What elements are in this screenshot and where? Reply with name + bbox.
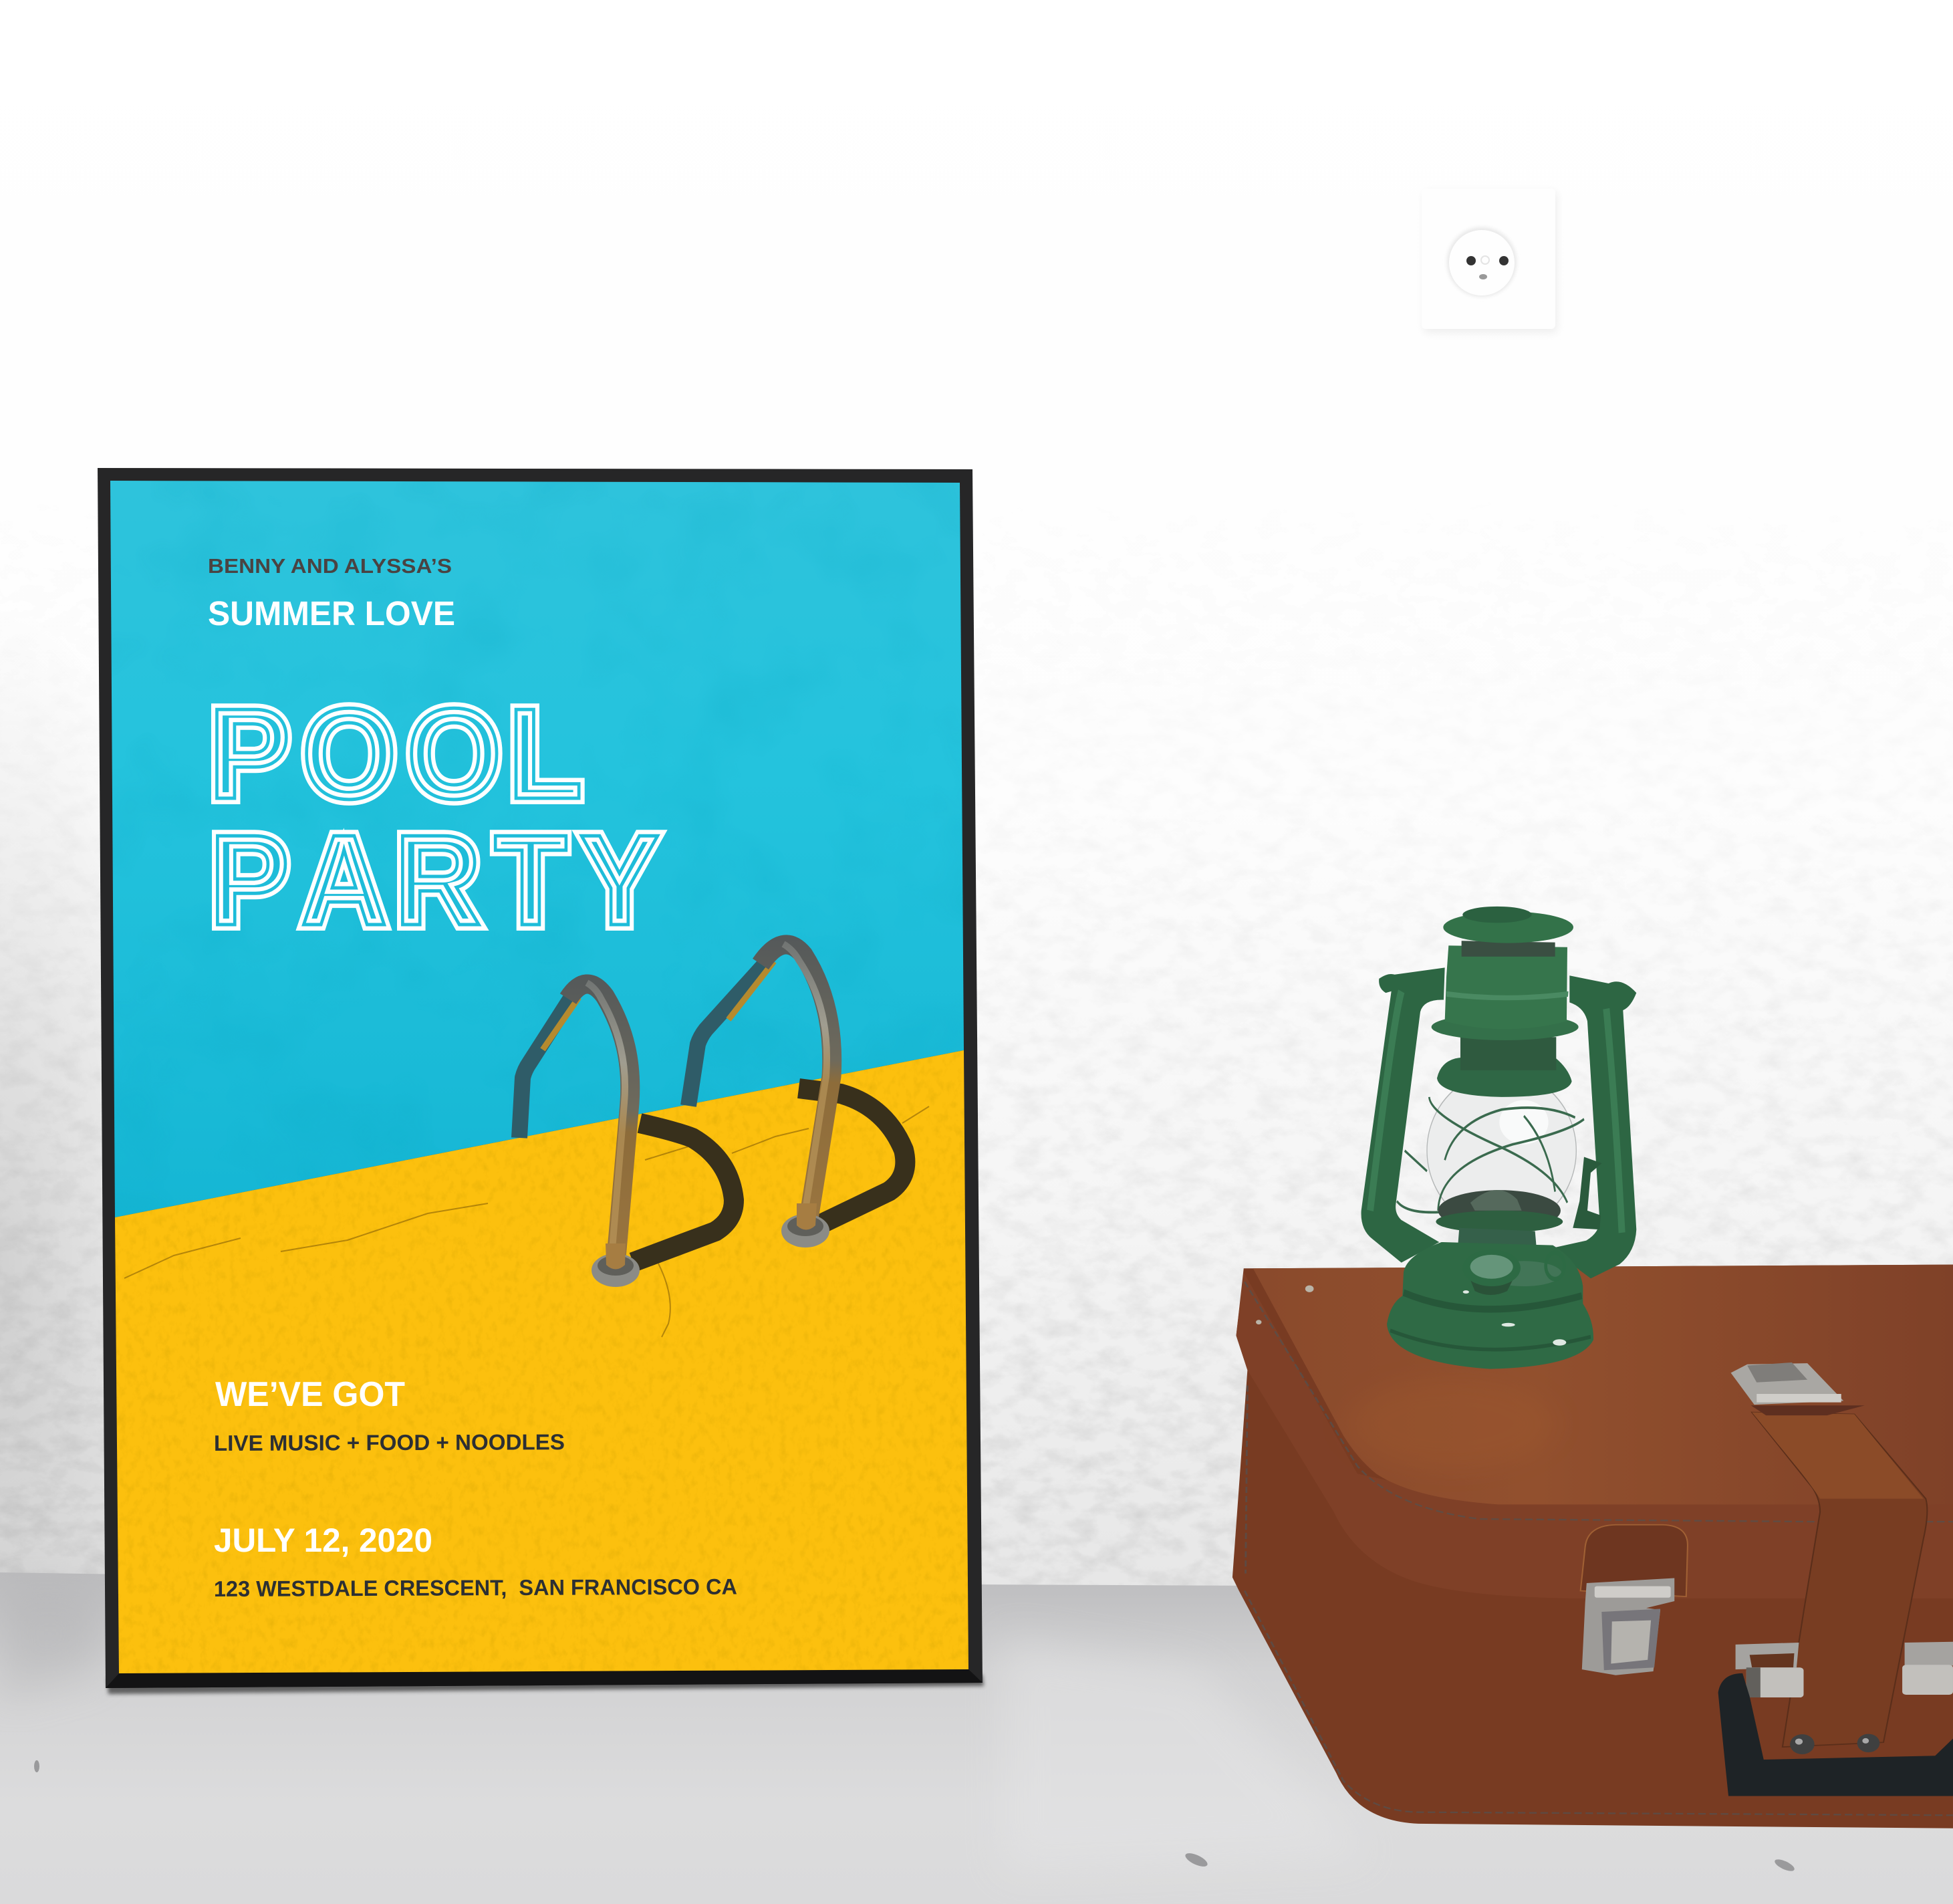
lantern lower stem: [1457, 1228, 1537, 1256]
lantern base: [1387, 1242, 1593, 1369]
poster frame: [98, 468, 983, 1688]
suitcase lid band: [1236, 1272, 1953, 1598]
lantern wire cage: [1397, 1097, 1584, 1212]
ladder left rail: [519, 983, 630, 1266]
suitcase top: [1253, 1265, 1953, 1504]
leather strap: [1752, 1413, 1927, 1747]
ladder right rail: [688, 944, 832, 1227]
address: 123 WESTDALE CRESCENT, SAN FRANCISCO CA: [214, 1574, 737, 1601]
ladder shadows: [633, 1088, 905, 1262]
lantern highlights: [1463, 1290, 1566, 1346]
lantern wick ring: [1546, 1253, 1565, 1279]
suitcase body: [1232, 1265, 1953, 1828]
wall background: [0, 687, 1953, 1586]
title: Pool (striped lettering): POOL: [209, 682, 583, 826]
suitcase: [1232, 1265, 1953, 1828]
wall socket: [1422, 189, 1557, 333]
lantern glass globe: [1427, 1072, 1576, 1229]
floor: [0, 1572, 1953, 1904]
text: live music + food + noodles: LIVE MUSIC + FOOD + NOODLES: [214, 1429, 565, 1455]
ladder right flange: [781, 1203, 829, 1247]
heading: We've Got: WE’VE GOT: [215, 1375, 405, 1414]
title: Party (striped lettering): PARTY: [209, 808, 660, 952]
lantern drum: [1445, 945, 1567, 1029]
yellow pool deck: [115, 1050, 968, 1673]
subtitle: Benny and Alyssa's: BENNY AND ALYSSA’S: [208, 554, 452, 578]
handle: [1718, 1673, 1953, 1796]
date: July 12, 2020: JULY 12, 2020: [214, 1522, 432, 1559]
lantern mid flange: [1432, 1014, 1579, 1040]
top latch: [1731, 1362, 1865, 1415]
poster artwork: [107, 478, 972, 1678]
lantern left handle: [1361, 967, 1445, 1263]
poster floor shadow: [107, 1675, 984, 1694]
handle brackets: [1736, 1642, 1953, 1697]
lantern burner: [1438, 1190, 1561, 1231]
heading: Summer Love: SUMMER LOVE: [208, 594, 455, 632]
lantern cap: [1443, 911, 1573, 943]
lantern collar: [1437, 1058, 1572, 1097]
lantern side lever: [1573, 1157, 1602, 1229]
pool water: [110, 481, 964, 1217]
title: Pool (striped lettering): POOL: [209, 682, 583, 826]
lantern: [1361, 907, 1636, 1369]
title: Party (striped lettering): PARTY: [209, 808, 660, 952]
lantern right handle: [1551, 975, 1636, 1278]
lantern neck: [1460, 1037, 1556, 1070]
suitcase stitching: [1245, 1282, 1953, 1815]
lantern fill cap: [1470, 1280, 1513, 1295]
ladder left flange: [592, 1243, 640, 1287]
front latch: [1581, 1525, 1688, 1675]
